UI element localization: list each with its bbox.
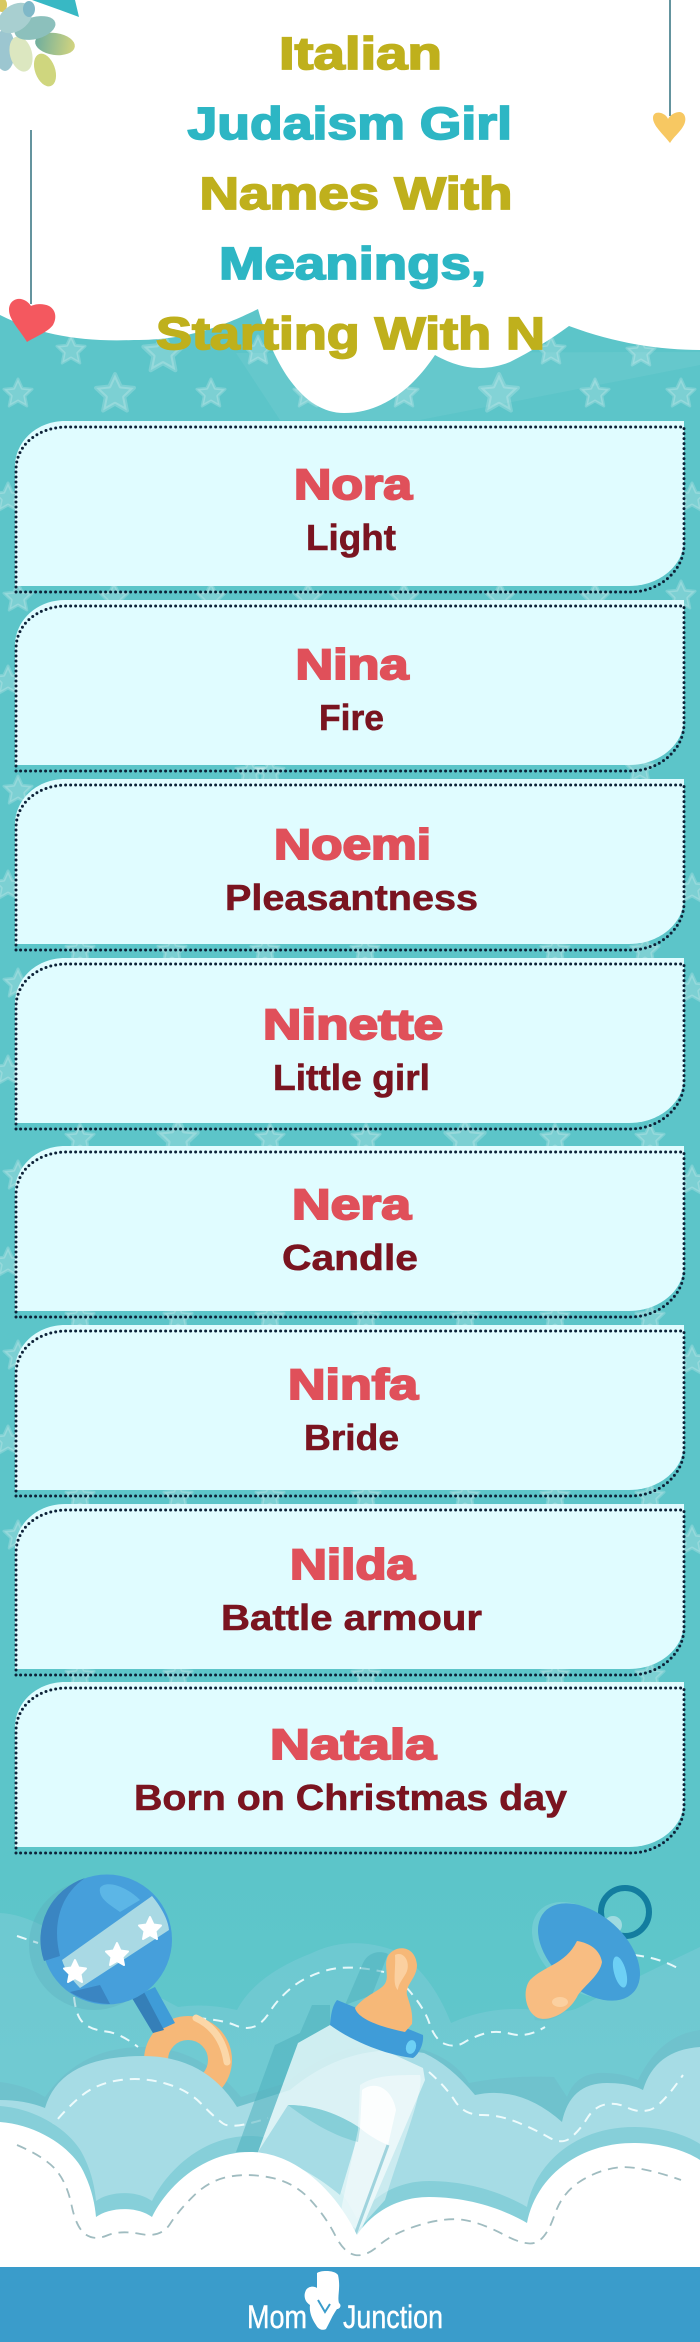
panel: Nina: Nina bbox=[296, 641, 410, 689]
panel: Natala: Born on Christmas day bbox=[134, 1777, 567, 1818]
panel: Nera: Nera bbox=[292, 1181, 412, 1229]
logo: MomJunction: Junction bbox=[343, 2299, 443, 2335]
front light cloud layer bbox=[0, 2047, 700, 2270]
icon: rattle bbox=[29, 1874, 227, 2092]
footer bar bbox=[0, 2267, 700, 2342]
icon: red heart on string bbox=[9, 130, 55, 342]
title: Italian bbox=[279, 28, 442, 79]
white dashed stitching on light cloud bbox=[47, 2072, 683, 2141]
panel: Nora: Light bbox=[306, 517, 396, 558]
title: Meanings, bbox=[219, 238, 486, 289]
panel: Noemi: Noemi bbox=[274, 821, 431, 869]
panel: Nilda: Battle armour bbox=[221, 1597, 482, 1638]
panel: Nera bbox=[15, 1146, 684, 1317]
logo: MomJunction bbox=[247, 2271, 443, 2335]
title: Starting With N bbox=[156, 308, 545, 359]
icon: pacifier bbox=[513, 1883, 658, 2021]
panel: Ninette: Little girl bbox=[273, 1057, 430, 1098]
title: Names With bbox=[200, 168, 512, 219]
panel: Natala: Natala bbox=[270, 1721, 437, 1769]
top-left teal flag bbox=[32, 0, 79, 17]
panel: Nora: Nora bbox=[294, 461, 413, 509]
panel: Noemi: Pleasantness bbox=[225, 877, 478, 918]
panel: Nera: Candle bbox=[282, 1237, 418, 1278]
star pattern background bbox=[0, 332, 700, 1688]
logo: MomJunction: Mom bbox=[247, 2299, 307, 2335]
panel: Natala bbox=[15, 1682, 684, 1853]
panel: Ninette: Ninette bbox=[263, 1001, 443, 1049]
white foreground cloud bbox=[0, 2122, 700, 2267]
panel: Noemi bbox=[15, 779, 684, 950]
panel: Nina bbox=[15, 600, 684, 771]
title bbox=[156, 28, 545, 359]
panel: Ninfa: Ninfa bbox=[288, 1361, 419, 1409]
back cloud layers bbox=[0, 1913, 700, 2270]
cloud shadow bbox=[0, 2106, 700, 2264]
panel: Ninfa: Bride bbox=[304, 1417, 399, 1458]
white dashed stitching on back clouds bbox=[17, 1936, 681, 2047]
title: Judaism Girl bbox=[188, 98, 512, 149]
icon: yellow heart on string bbox=[653, 0, 685, 143]
panel: Ninfa bbox=[15, 1325, 684, 1496]
header white cloud bbox=[0, 0, 700, 413]
panel: Nora bbox=[15, 421, 684, 592]
panel: Ninette bbox=[15, 958, 684, 1129]
panel: Nilda: Nilda bbox=[290, 1541, 416, 1589]
panel: Nilda bbox=[15, 1504, 684, 1675]
icon: baby bottle bbox=[236, 1948, 425, 2240]
grey dashed stitching on white cloud bbox=[17, 2145, 681, 2255]
icon: watercolour leaves bbox=[0, 0, 76, 89]
panel: Nina: Fire bbox=[319, 697, 384, 738]
